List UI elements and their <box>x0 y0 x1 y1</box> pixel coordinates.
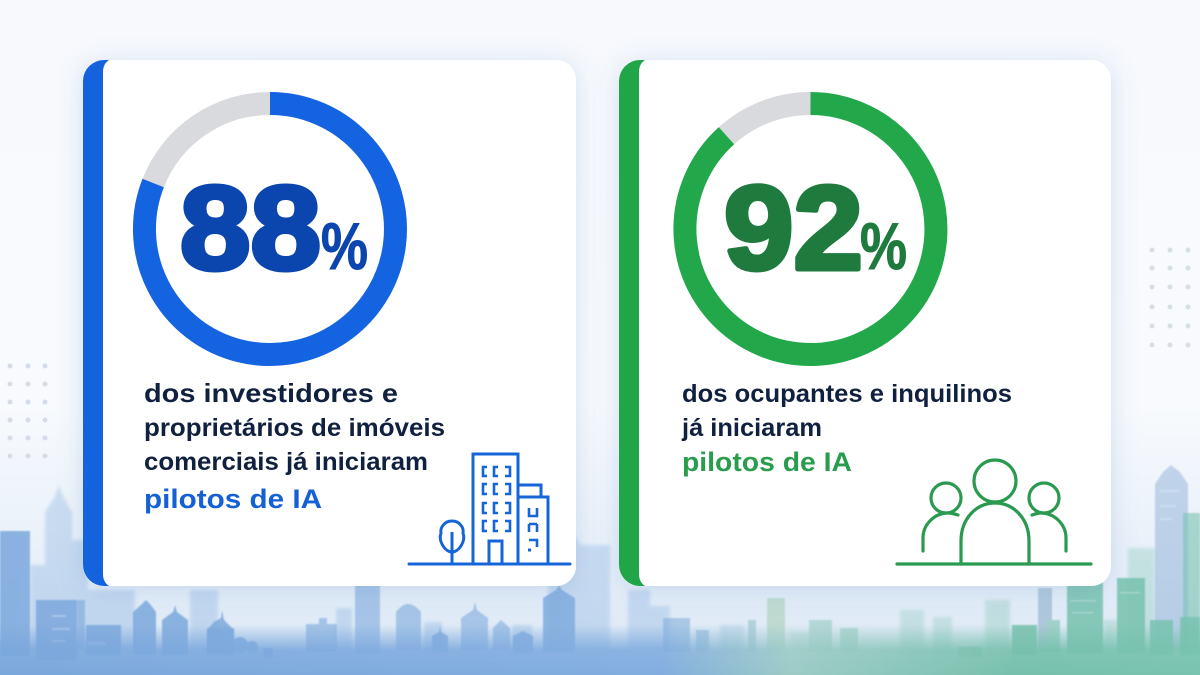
icon: people <box>897 460 1091 564</box>
card background <box>83 60 576 586</box>
description text <box>144 378 445 514</box>
city skyline <box>0 465 1200 675</box>
description text: dos investidores e <box>144 378 398 408</box>
stat: 88%: 88 <box>180 162 321 295</box>
panel: investors card <box>83 60 576 586</box>
stat: 92%: 92 <box>724 162 863 295</box>
dot pattern left <box>8 364 48 458</box>
donut chart: 92% <box>685 103 936 354</box>
dot pattern right <box>1150 248 1190 348</box>
description text: pilotos de IA <box>144 484 322 514</box>
stat: 88%: % <box>321 209 368 283</box>
description text <box>681 380 1012 477</box>
description text: comerciais já iniciaram <box>144 448 428 476</box>
panel: occupants card <box>619 60 1111 586</box>
description text: proprietários de imóveis <box>144 414 445 442</box>
description text: já iniciaram <box>681 414 822 442</box>
description text: dos ocupantes e inquilinos <box>682 380 1012 408</box>
card background <box>619 60 1111 586</box>
description text: pilotos de IA <box>682 447 852 477</box>
icon: buildings <box>409 454 570 564</box>
stat: 92%: % <box>860 209 907 283</box>
donut chart: 88% <box>144 103 395 354</box>
